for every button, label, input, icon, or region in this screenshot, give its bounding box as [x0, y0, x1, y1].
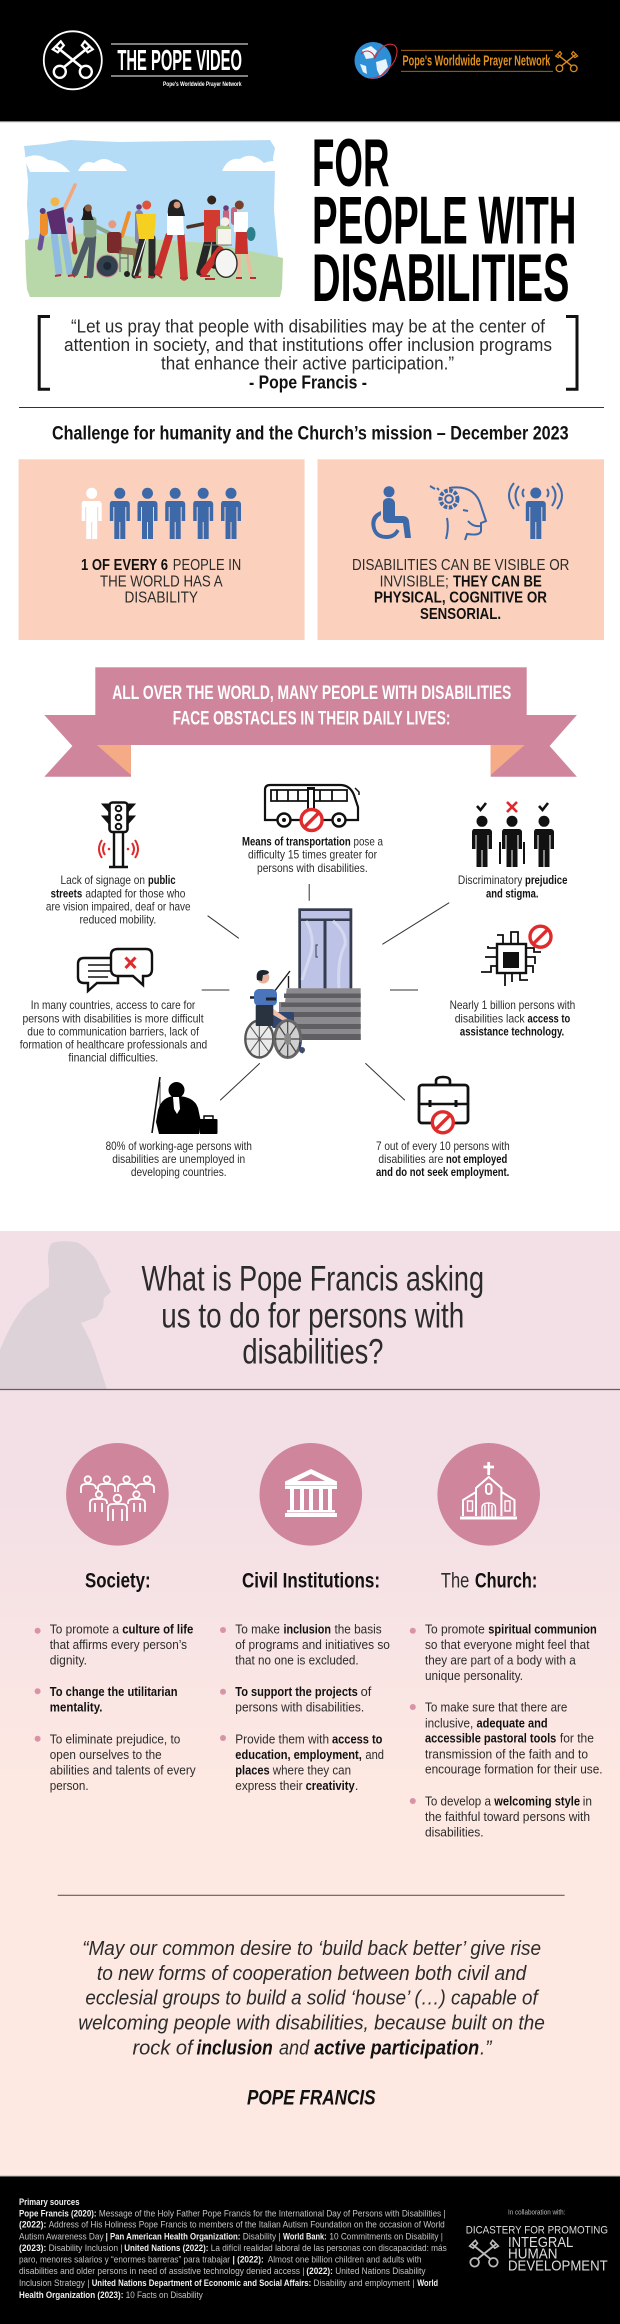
primary sources: Inclusion Strategy |: [19, 2278, 89, 2288]
bullets: Civil Institutions: that no one is excluded.: [235, 1652, 359, 1667]
primary sources: Disability and employment |: [314, 2278, 414, 2288]
bullets: The Church: transmission of the faith and to: [425, 1746, 588, 1761]
icon: briefcase: [419, 1077, 468, 1133]
closing quote: to new forms of cooperation between both civil and: [97, 1962, 527, 1985]
logo: The Pope Video: Pope's Worldwide Prayer Network: [163, 81, 242, 88]
text: not employed: and do not seek employment.: [376, 1165, 509, 1179]
icon: bus: [265, 785, 359, 830]
primary sources: 10 Commitments on Disability |: [329, 2231, 443, 2241]
bullets: Civil Institutions: Provide them with: [235, 1731, 329, 1746]
logo: The Pope Video: [44, 31, 248, 89]
text: unemployment: disabilities are unemployed in: [112, 1152, 245, 1166]
bullets: Society: To change the utilitarian: [50, 1684, 177, 1699]
bullets: Civil Institutions: access to: [332, 1731, 382, 1746]
heading: what is Pope Francis asking: [142, 1260, 484, 1371]
closing quote: [78, 1937, 545, 2059]
primary sources: Disability Inclusion |: [49, 2243, 123, 2253]
icon: three people: [472, 802, 554, 867]
text: one of six: PEOPLE IN: [173, 557, 241, 574]
text: types: SENSORIAL.: [420, 606, 501, 623]
text: transportation: pose a: [354, 835, 383, 849]
logo: Pope's Worldwide Prayer Network: [354, 42, 578, 79]
quote with brackets: “Let us pray that people with disabilities may be at the center of: [71, 317, 546, 337]
logo: The Pope Video: THE POPE VIDEO: [117, 45, 242, 77]
primary sources: Address of His Holiness Pope Francis to members of the Italian Autism Foundation on the occasion of World: [49, 2220, 445, 2230]
text: public streets: are vision impaired, deaf or have: [46, 899, 191, 913]
text: public streets: streets: [51, 886, 82, 900]
text: assistance technology: access to: [528, 1011, 570, 1025]
heading: Civil Institutions: Civil Institutions:: [242, 1569, 380, 1592]
primary sources: United Nations (2022):: [124, 2243, 208, 2253]
bullets: The Church: To make sure that there are: [425, 1700, 567, 1715]
bullets: The Church: To promote: [425, 1621, 485, 1636]
connector lines: [202, 884, 449, 1100]
bullets: Civil Institutions: of programs and initiatives so: [235, 1637, 390, 1652]
heading: The Church: [441, 1569, 537, 1592]
closing quote: rock of: [132, 2036, 195, 2059]
primary sources: Pope Francis (2020):: [19, 2209, 97, 2219]
icon: head with gears: [430, 486, 486, 540]
bullets: The Church: adequate and: [476, 1715, 548, 1730]
section: what is Pope Francis asking: [0, 1231, 620, 2176]
text: prejudice: [458, 873, 568, 900]
column: Society: [35, 1443, 196, 1793]
text: care access: formation of healthcare professionals and: [20, 1038, 207, 1052]
bullets: The Church: unique personality.: [425, 1668, 523, 1683]
icon: chip: [481, 926, 551, 986]
quote with brackets: that enhance their active participation.”: [161, 354, 454, 374]
text: not employed: not employed: [446, 1152, 507, 1166]
bullets: Society: open ourselves to the: [50, 1747, 162, 1762]
primary sources: United Nations Disability: [335, 2266, 426, 2276]
primary sources: Almost one billion children and adults with: [268, 2255, 422, 2265]
bullets: The Church: encourage formation for their use.: [425, 1762, 603, 1777]
text: care access: [20, 998, 207, 1065]
bullets: Society: mentality.: [50, 1700, 102, 1715]
closing quote: ecclesial groups to build a solid ‘house’ (…) capable of: [85, 1987, 540, 2010]
text: public streets: Lack of signage on: [60, 873, 145, 887]
text: transportation: [242, 835, 383, 875]
text: unemployment: 80% of working-age persons with: [106, 1139, 252, 1153]
text: types: INVISIBLE;: [380, 573, 449, 590]
primary sources: La difícil realidad laboral de las personas con discapacidad: más: [211, 2243, 447, 2253]
icon: church: [460, 1462, 517, 1518]
bullets: Civil Institutions: .: [355, 1778, 358, 1793]
text: public streets: reduced mobility.: [80, 913, 156, 927]
heading: what is Pope Francis asking: us to do for persons with: [161, 1296, 464, 1335]
primary sources: Disability |: [243, 2231, 281, 2241]
primary sources: [19, 2197, 447, 2300]
text: care access: persons with disabilities is more difficult: [22, 1011, 204, 1025]
primary sources: disabilities and older persons in need of assistive technology denied access |: [19, 2266, 304, 2276]
heading: The Church: Church:: [475, 1569, 537, 1592]
bullets: Civil Institutions: persons with disabilities.: [235, 1700, 364, 1715]
illustration: diverse group of people: [24, 140, 283, 297]
title: [312, 125, 576, 316]
primary sources: Autism Awareness Day: [19, 2231, 104, 2241]
bullets: Society: person.: [50, 1778, 89, 1793]
text: one of six: 1 OF EVERY 6: [81, 557, 168, 574]
bullets: The Church: for the: [560, 1731, 594, 1746]
bullets: Society: that affirms every person’s: [50, 1637, 187, 1652]
primary sources: 10 Facts on Disability: [126, 2290, 203, 2300]
text: one of six: [81, 557, 241, 607]
obstacle: prejudice: [458, 802, 568, 900]
text: public streets: adapted for those who: [85, 886, 186, 900]
text: assistance technology: [450, 998, 575, 1038]
bullets: Civil Institutions: express their: [235, 1778, 303, 1793]
primary sources: Primary sources: [19, 2197, 80, 2207]
obstacle: transportation: [242, 785, 383, 875]
central illustration: wheelchair user before steps and door: [245, 908, 361, 1058]
title: FOR: [312, 125, 390, 201]
collaboration logo: In collaboration with:: [508, 2209, 565, 2216]
bullets: Civil Institutions: To support the projects: [235, 1684, 358, 1699]
primary sources: | (2022):: [232, 2255, 264, 2265]
heading: what is Pope Francis asking: What is Pope Francis asking: [142, 1260, 484, 1299]
heading: what is Pope Francis asking: disabilities?: [242, 1332, 384, 1371]
icon: six people: [82, 488, 241, 539]
text: not employed: [376, 1139, 510, 1179]
obstacle: not employed: [376, 1077, 510, 1179]
bullets: Civil Institutions: To make: [235, 1621, 280, 1636]
text: unemployment: developing countries.: [131, 1165, 227, 1179]
text: types: DISABILITIES CAN BE VISIBLE OR: [352, 557, 569, 574]
column: The Church: [410, 1443, 603, 1839]
text: assistance technology: Nearly 1 billion persons with: [450, 998, 575, 1012]
primary sources: World: [417, 2278, 438, 2288]
bullets: The Church: To develop a: [425, 1793, 492, 1808]
heading: Society: Society:: [85, 1569, 151, 1592]
ribbon banner: FACE OBSTACLES IN THEIR DAILY LIVES:: [173, 708, 450, 729]
text: care access: due to communication barriers, lack of: [27, 1024, 199, 1038]
icon: wheelchair user: [371, 486, 411, 539]
primary sources: | Pan American Health Organization:: [106, 2231, 240, 2241]
quote with brackets: attention in society, and that institutions offer inclusion programs: [64, 335, 552, 355]
silhouette: Pope Francis: [0, 1241, 111, 1389]
bullets: Society: abilities and talents of every: [50, 1762, 196, 1777]
bullets: Civil Institutions: and: [365, 1747, 384, 1762]
quote with brackets: [39, 316, 577, 392]
text: prejudice: prejudice: [525, 873, 568, 887]
icon: person with sound waves: [509, 483, 562, 539]
obstacle: public streets: [46, 802, 191, 927]
text: types: [352, 557, 569, 623]
text: not employed: 7 out of every 10 persons with: [376, 1139, 510, 1153]
bullets: The Church: inclusive,: [425, 1715, 473, 1730]
bullets: Civil Institutions: education, employment,: [235, 1747, 362, 1762]
icon: institution building: [285, 1469, 337, 1517]
text: transportation: Means of transportation: [242, 835, 351, 849]
closing quote: active participation: [314, 2036, 479, 2059]
text: one of six: THE WORLD HAS A: [100, 573, 223, 590]
primary sources: (2023):: [19, 2243, 46, 2253]
footer: [0, 2176, 620, 2324]
primary sources: (2022):: [306, 2266, 333, 2276]
closing quote: welcoming people with disabilities, because built on the: [78, 2012, 545, 2035]
text: prejudice: Discriminatory: [458, 873, 522, 887]
text: assistance technology: disabilities lack: [455, 1011, 526, 1025]
collaboration logo: INTEGRAL: [508, 2235, 573, 2251]
closing quote: inclusion: [196, 2036, 273, 2059]
text: care access: financial difficulties.: [68, 1051, 158, 1065]
bullets: Civil Institutions: inclusion: [284, 1621, 331, 1636]
quote with brackets: - Pope Francis -: [249, 372, 367, 392]
text: prejudice: and stigma.: [486, 886, 538, 900]
text: types: THEY CAN BE: [453, 573, 542, 590]
bullets: Civil Institutions: [220, 1621, 390, 1793]
bullets: Society: culture of life: [122, 1621, 193, 1636]
text: not employed: disabilities are: [378, 1152, 444, 1166]
text: unemployment: [106, 1139, 252, 1179]
bullets: Society: To eliminate prejudice, to: [50, 1731, 180, 1746]
icon: speech bubbles: [78, 949, 152, 991]
bullets: Civil Institutions: places: [235, 1762, 270, 1777]
bullets: Society: To promote a: [50, 1621, 120, 1636]
bullets: Society: dignity.: [50, 1652, 87, 1667]
text: care access: In many countries, access to care for: [31, 998, 195, 1012]
bullets: The Church: disabilities.: [425, 1824, 484, 1839]
closing quote: “May our common desire to ‘build back better’ give rise: [82, 1937, 541, 1960]
obstacle: assistance technology: [450, 926, 575, 1038]
closing quote: and: [279, 2036, 310, 2059]
text: one of six: DISABILITY: [124, 590, 198, 607]
text: public streets: public: [148, 873, 176, 887]
text: transportation: difficulty 15 times greater for: [248, 848, 377, 862]
text: types: PHYSICAL, COGNITIVE OR: [374, 590, 547, 607]
primary sources: United Nations Department of Economic and Social Affairs:: [92, 2278, 311, 2288]
column: Civil Institutions: [220, 1443, 390, 1793]
quote attribution: POPE FRANCIS: [247, 2085, 376, 2109]
bullets: Society: [35, 1621, 196, 1793]
text: assistance technology: assistance technology.: [460, 1024, 564, 1038]
bullets: The Church: they are part of a body with a: [425, 1652, 576, 1667]
bullets: The Church: spiritual communion: [488, 1621, 597, 1636]
icon: traffic light: [99, 802, 138, 867]
primary sources: (2022):: [19, 2220, 46, 2230]
ribbon banner: [44, 667, 577, 777]
primary sources: Health Organization (2023):: [19, 2290, 123, 2300]
obstacle: unemployment: [106, 1077, 252, 1179]
bullets: The Church: [410, 1621, 603, 1839]
collaboration logo: [466, 2209, 608, 2274]
icon: slumped man: [152, 1077, 218, 1134]
primary sources: Message of the Holy Father Pope Francis for the International Day of Persons with Disabilities |: [99, 2209, 446, 2219]
bullets: The Church: accessible pastoral tools: [425, 1731, 556, 1746]
obstacle: care access: [20, 949, 207, 1065]
collaboration logo: HUMAN: [508, 2246, 558, 2262]
bullets: Civil Institutions: where they can: [272, 1762, 351, 1777]
bullets: The Church: welcoming style: [493, 1793, 580, 1808]
closing quote: .”: [480, 2036, 493, 2059]
bullets: The Church: the faithful toward persons with: [425, 1809, 590, 1824]
bullets: Civil Institutions: creativity: [306, 1778, 355, 1793]
bullets: Civil Institutions: the basis: [334, 1621, 382, 1636]
panel: types of disability: [318, 459, 604, 640]
bullets: The Church: in: [583, 1793, 592, 1808]
heading: The Church: The: [441, 1569, 469, 1592]
header band: [0, 0, 620, 122]
text: transportation: persons with disabilities.: [257, 861, 368, 875]
bullets: The Church: so that everyone might feel that: [425, 1637, 590, 1652]
bullets: Civil Institutions: of: [361, 1684, 372, 1699]
collaboration logo: DEVELOPMENT: [508, 2258, 608, 2274]
primary sources: World Bank:: [283, 2231, 327, 2241]
panel: 1 of every 6: [19, 459, 305, 640]
icon: group of people: [81, 1476, 154, 1521]
primary sources: paro, menores salarios y “enormes barreras” para trabajar: [19, 2255, 230, 2265]
text: public streets: [46, 873, 191, 927]
